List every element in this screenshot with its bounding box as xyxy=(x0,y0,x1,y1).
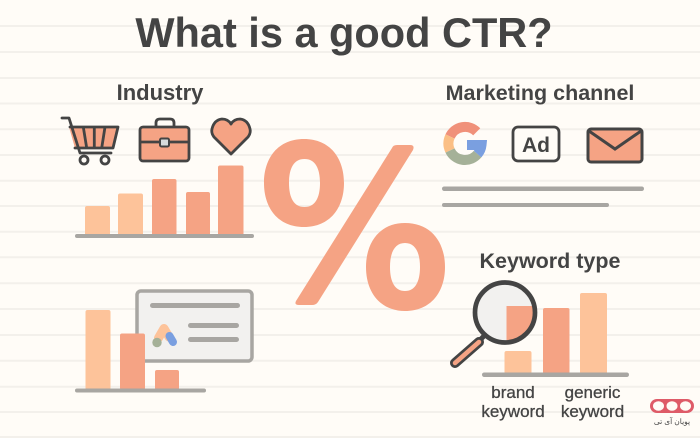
icon: Ad box xyxy=(513,127,559,161)
label: generic keyword: keyword xyxy=(561,402,624,421)
ad screen xyxy=(137,291,252,361)
label: brand keyword: keyword xyxy=(481,402,545,421)
heading: marketing channel: Marketing channel xyxy=(446,81,634,105)
percent symbol xyxy=(264,139,445,311)
bar chart: industry xyxy=(75,166,254,238)
icon: envelope xyxy=(588,129,642,162)
icon: Google G xyxy=(448,127,482,160)
logo watermark: پویان آی تی xyxy=(654,416,690,426)
icon: heart xyxy=(212,119,250,154)
title: What is a good CTR? xyxy=(135,9,553,56)
text placeholder lines xyxy=(442,186,644,207)
heading: keyword type: Keyword type xyxy=(480,249,621,273)
panel: industry xyxy=(62,80,254,238)
label: brand keyword: brand xyxy=(491,383,535,402)
icon: magnifying glass xyxy=(455,282,536,363)
icon: briefcase xyxy=(140,119,189,161)
panel: ads chart xyxy=(75,291,252,392)
icon: Google Ads logo xyxy=(152,328,173,347)
bar chart: keyword xyxy=(482,293,629,377)
logo watermark xyxy=(650,399,694,426)
panel: keyword type xyxy=(455,249,629,421)
panel: marketing channel xyxy=(442,81,644,207)
label: generic keyword: generic xyxy=(565,383,620,402)
icon: Ad box: Ad xyxy=(522,134,550,157)
icon: shopping cart xyxy=(62,118,118,164)
bar chart: ads xyxy=(75,310,206,392)
heading: industry: Industry xyxy=(117,80,204,105)
